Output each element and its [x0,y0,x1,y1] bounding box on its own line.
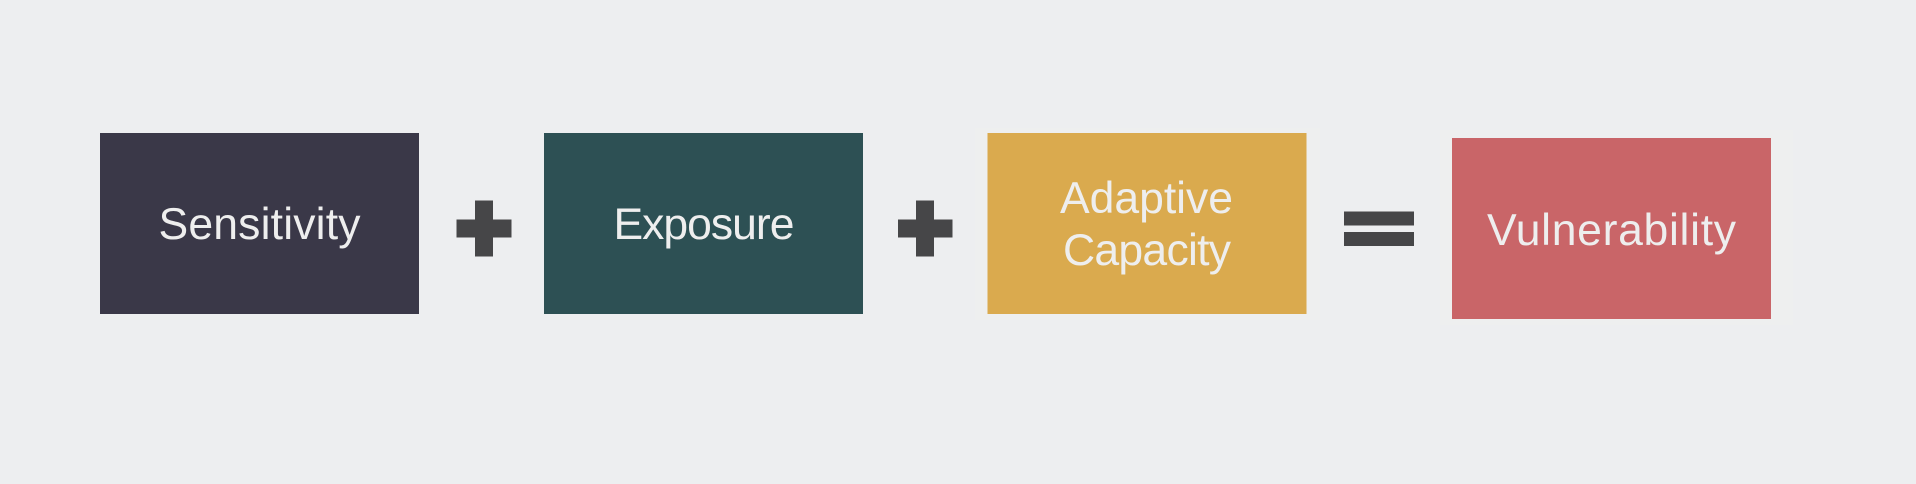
label: Sensitivity: Sensitivity [158,200,361,249]
label: Adaptive Capacity [1060,174,1233,275]
panel: sensitivity [100,133,419,314]
icon: plus sign 2 [898,200,952,256]
panel: vulnerability [1452,138,1771,319]
icon: equals sign [1344,212,1414,246]
panel: exposure [544,133,863,314]
label: Adaptive Capacity: Capacity [1063,226,1232,275]
panel: adaptive capacity [988,133,1306,314]
label: Adaptive Capacity: Adaptive [1060,174,1233,223]
label: Vulnerability: Vulnerability [1487,206,1737,255]
label: Exposure: Exposure [614,200,794,249]
icon: plus sign 1 [456,200,512,256]
